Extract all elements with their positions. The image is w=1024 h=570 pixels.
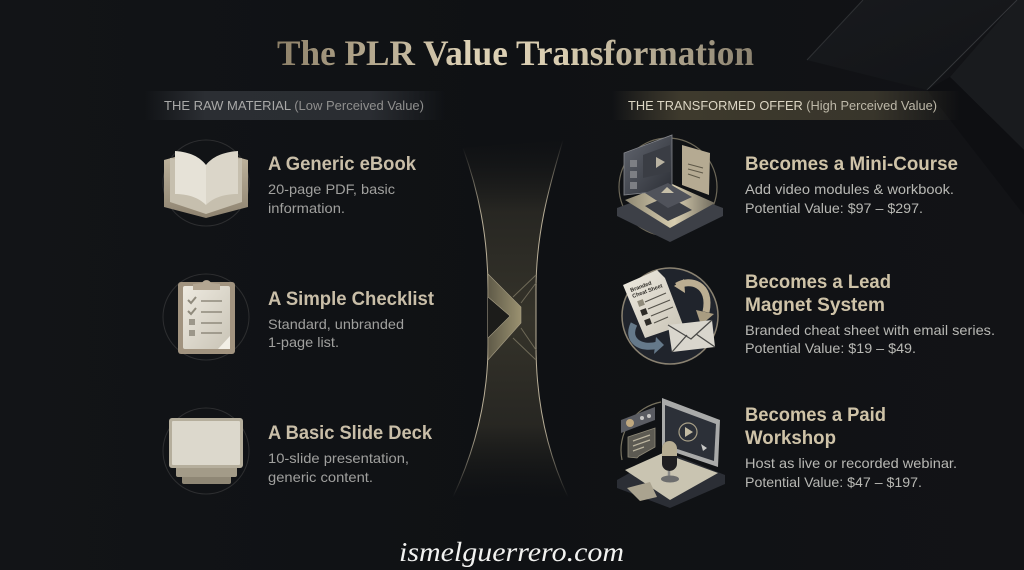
icon: open book — [163, 140, 249, 226]
item: lead magnet system: Becomes a Lead — [745, 271, 891, 293]
item: basic slide deck: generic content. — [268, 469, 373, 485]
right column header: THE TRANSFORMED OFFER (High Perceived Value) — [628, 99, 937, 113]
item: generic ebook — [163, 140, 416, 226]
item: simple checklist: Standard, unbranded — [268, 316, 404, 332]
item: basic slide deck — [163, 408, 432, 494]
title: The PLR Value Transformation — [277, 33, 754, 73]
item: basic slide deck: 10-slide presentation, — [268, 450, 409, 466]
item: generic ebook: information. — [268, 200, 345, 216]
item: mini-course — [617, 135, 958, 242]
icon: cheat sheet and envelope: Branded — [630, 281, 653, 294]
footer website: ismelguerrero.com — [399, 537, 624, 567]
item: lead magnet system: Magnet System — [745, 294, 885, 316]
icon: clipboard — [163, 274, 249, 360]
item: paid workshop: Becomes a Paid — [745, 404, 886, 426]
right column header — [612, 91, 960, 120]
item: mini-course: Add video modules & workbook. — [745, 181, 954, 197]
icon: slide stack — [163, 408, 249, 494]
icon: mini-course platform — [617, 135, 723, 242]
left column header — [145, 91, 445, 120]
item: simple checklist: A Simple Checklist — [268, 288, 434, 310]
item: mini-course: Becomes a Mini-Course — [745, 153, 958, 175]
icon: cheat sheet and envelope — [622, 268, 718, 364]
item: lead magnet system: Potential Value: $19 – $49. — [745, 340, 916, 356]
item: basic slide deck: A Basic Slide Deck — [268, 422, 432, 444]
centre transformation graphic — [453, 140, 568, 497]
item: generic ebook: 20-page PDF, basic — [268, 181, 395, 197]
item: paid workshop: Workshop — [745, 427, 836, 449]
icon: microphone and screen — [617, 398, 725, 508]
item: lead magnet system — [622, 268, 995, 364]
icon: cheat sheet and envelope: Cheat Sheet — [632, 283, 664, 300]
item: paid workshop — [617, 398, 957, 508]
item: mini-course: Potential Value: $97 – $297. — [745, 200, 923, 216]
item: generic ebook: A Generic eBook — [268, 153, 416, 175]
item: simple checklist: 1-page list. — [268, 334, 339, 350]
item: lead magnet system: Branded cheat sheet with email series. — [745, 322, 995, 338]
item: simple checklist — [163, 274, 434, 360]
item: paid workshop: Host as live or recorded webinar. — [745, 455, 957, 471]
item: paid workshop: Potential Value: $47 – $197. — [745, 474, 922, 490]
left column header: THE RAW MATERIAL (Low Perceived Value) — [164, 99, 424, 113]
